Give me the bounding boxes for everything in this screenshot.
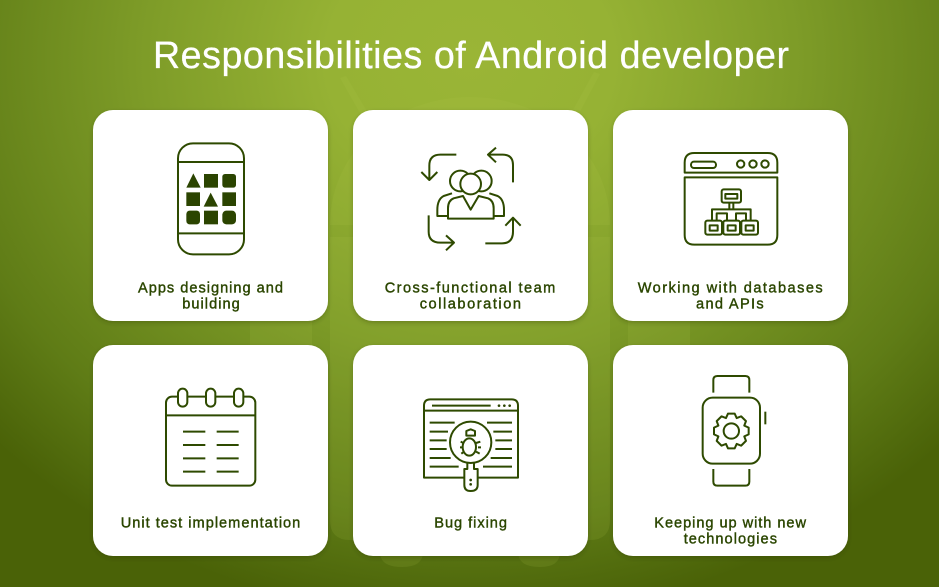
icon: browser window with magnified bug [424,399,518,491]
icon: browser window with hierarchy [685,153,777,245]
panel: apps designing and building [93,110,328,321]
label [138,280,283,312]
label: building [182,296,240,312]
label [638,280,823,312]
label: collaboration [420,296,521,312]
label: and APIs [696,296,764,312]
panel: bug fixing [353,345,588,556]
label [654,516,806,548]
icon: team with cycle arrows [421,148,521,250]
card background [613,110,848,321]
label [385,280,555,312]
card background [613,345,848,556]
panel: unit test implementation [93,345,328,556]
icon: smartwatch with gear [703,376,765,486]
label: Working with databases [638,280,823,296]
panel: working with databases and APIs [613,110,848,321]
label: Cross-functional team [385,280,555,296]
label: Apps designing and [138,280,283,296]
title: Responsibilities of Android developer [153,34,789,76]
icon: smartphone with app grid [178,143,244,254]
panel: cross-functional team collaboration [353,110,588,321]
card background [93,110,328,321]
label: technologies [684,532,777,548]
card background [93,345,328,556]
label: Bug fixing [434,516,507,532]
card background [353,345,588,556]
label: Keeping up with new [654,516,806,532]
icon: calendar [166,389,255,486]
android mascot watermark [250,72,690,567]
panel: keeping up with new technologies [613,345,848,556]
card background [353,110,588,321]
label: Unit test implementation [121,516,300,532]
